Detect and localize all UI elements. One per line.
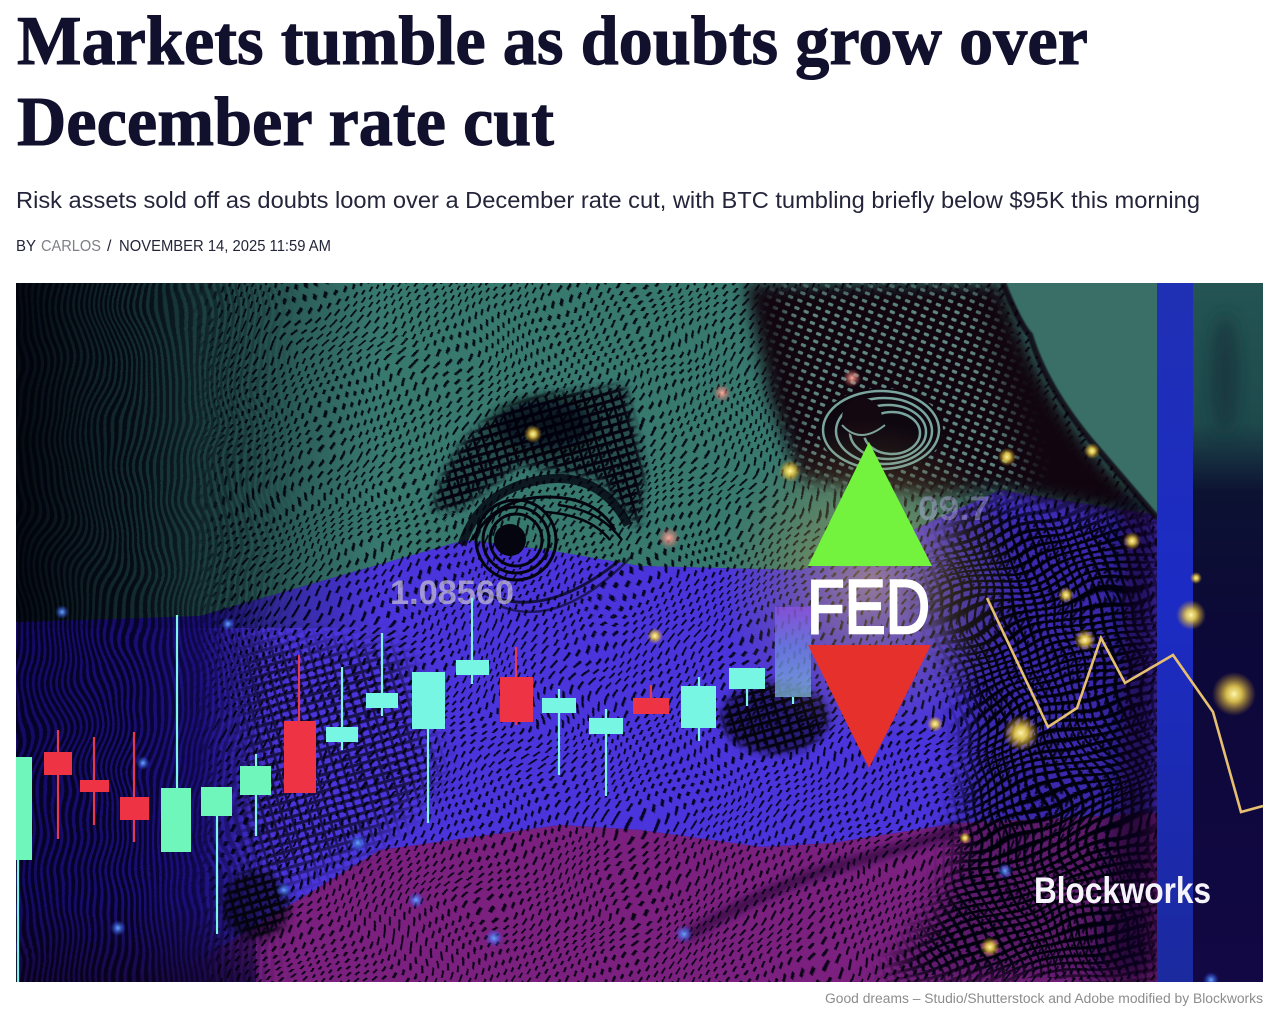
face contour <box>1003 283 1157 518</box>
gold price line <box>987 598 1263 812</box>
FED down arrow <box>808 645 931 768</box>
nostril blob <box>218 866 296 944</box>
teal upper tint <box>16 283 1157 625</box>
byline: NOVEMBER 14, 2025 11:59 AM <box>119 238 331 255</box>
deep bottom-left corner <box>16 911 256 982</box>
sparkles <box>55 369 1256 988</box>
wicks <box>18 598 793 982</box>
face edge shadow near strip <box>1100 500 1157 982</box>
byline: BY <box>16 238 36 255</box>
lip fold <box>685 830 958 937</box>
cyan bodies <box>326 660 765 742</box>
price labels: 09.7 <box>918 490 990 528</box>
golden glow behind FED <box>734 436 1005 722</box>
teal cap beyond the face <box>1003 283 1157 518</box>
right eye <box>819 388 943 472</box>
left brow mesh <box>428 380 650 532</box>
teal dark fade on the left <box>16 283 396 628</box>
vertical blue strip <box>1157 283 1193 982</box>
FED label: FED <box>807 565 930 650</box>
red bodies <box>44 677 669 820</box>
green bodies <box>16 757 271 860</box>
magenta lower band <box>208 813 1157 982</box>
headline: December rate cut <box>17 84 554 161</box>
dark hair patch <box>1211 315 1239 435</box>
subheading: Risk assets sold off as doubts loom over a December rate cut, with BTC tumbling briefly below $95K this morning <box>16 187 1200 213</box>
right socket <box>736 283 1157 528</box>
right cheek mesh <box>872 484 1157 982</box>
right socket cells <box>758 283 1044 506</box>
image background <box>192 490 1156 946</box>
hair lines <box>16 283 291 982</box>
left eye <box>462 478 632 612</box>
byline: / <box>107 238 112 255</box>
byline <box>16 238 331 255</box>
FED up arrow <box>808 442 932 566</box>
nose shadow <box>716 676 835 760</box>
headline <box>17 3 1088 161</box>
price labels: 1.08560 <box>390 574 514 612</box>
candlestick chart <box>16 598 811 982</box>
price labels <box>390 490 990 612</box>
photo credit: Good dreams – Studio/Shutterstock and Adobe modified by Blockworks <box>825 991 1263 1006</box>
headline: Markets tumble as doubts grow over <box>17 3 1088 80</box>
hero image: banknote portrait with trading chart <box>16 283 1263 982</box>
faded candle behind FED <box>775 607 811 697</box>
violet middle band <box>128 490 1157 958</box>
right column <box>1193 283 1263 982</box>
byline: CARLOS <box>41 238 101 255</box>
lower cheek mesh <box>222 624 456 901</box>
navy lower-left area <box>16 595 270 982</box>
engraved dash texture <box>16 283 1157 982</box>
Blockworks logo: Blockworks <box>1034 870 1211 911</box>
left brow core <box>495 401 595 449</box>
